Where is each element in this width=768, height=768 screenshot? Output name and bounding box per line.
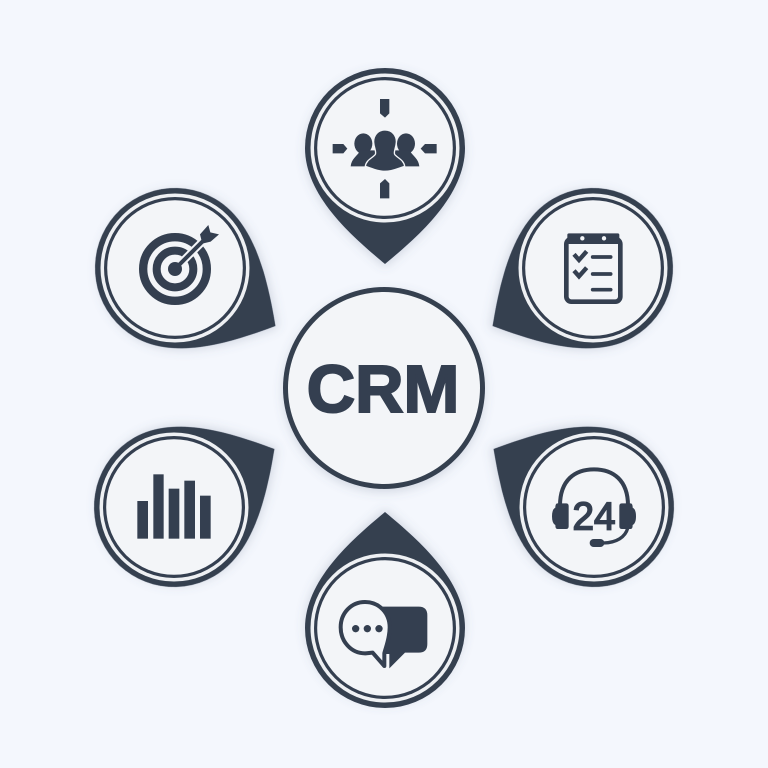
icon: chat bubbles [341,602,427,668]
panel: chat pin (bottom) [305,512,465,708]
icon: clipboard checklist [566,233,620,302]
icon: headset with 24: 24 [572,496,615,539]
icon: people with arrows pointing inward [333,99,437,198]
panel: 24 hour support pin (lower right) [454,380,703,616]
panel: team focus pin (top) [305,68,465,264]
icon: bar chart [137,474,211,539]
panel: central CRM circle [283,287,485,489]
panel: target pin (upper left) [66,159,315,395]
title: CRM: CRM [307,352,459,427]
icon: headset with 24 [552,469,636,547]
panel: bar chart pin (lower left) [65,380,314,616]
panel: checklist pin (upper right) [453,159,702,395]
icon: target with arrow [143,225,219,301]
